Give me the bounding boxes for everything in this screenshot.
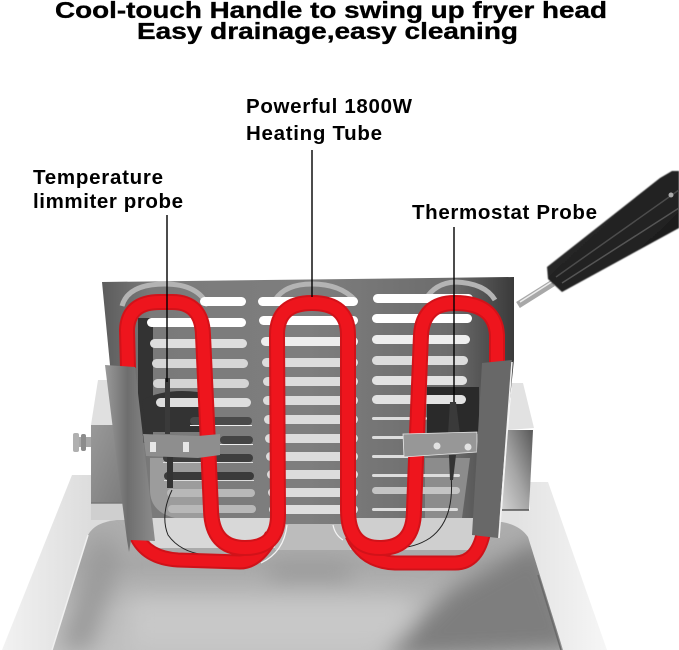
right clamp	[403, 432, 477, 457]
probe wires	[165, 475, 452, 555]
basket plate	[102, 277, 514, 563]
label: temperature limiter probe: limmiter probe	[33, 190, 183, 213]
red heating tube	[127, 302, 497, 563]
thermostat probe	[448, 402, 460, 480]
handle	[518, 171, 679, 305]
temperature limiter probe	[165, 378, 173, 488]
rim	[2, 475, 607, 650]
title	[55, 0, 607, 44]
left head box	[91, 380, 141, 520]
leader lines	[167, 150, 454, 402]
label: heating tube: Heating Tube	[246, 122, 382, 145]
basin	[52, 520, 563, 650]
label: temperature limiter probe: Temperature	[33, 166, 163, 189]
left side bracket	[105, 365, 155, 552]
dark left flange	[138, 318, 153, 443]
lower bowl right	[425, 458, 470, 518]
sensor recess left	[142, 391, 208, 432]
sensor recess right	[427, 387, 479, 434]
label: temperature limiter probe	[33, 166, 183, 213]
white tube reflections	[261, 525, 343, 563]
lower bowl left	[150, 458, 212, 518]
label: heating tube: Powerful 1800W	[246, 95, 413, 118]
fryer body	[2, 380, 607, 650]
right side bracket	[472, 360, 512, 538]
basin light and shadow	[60, 530, 580, 650]
slots column 2	[258, 297, 358, 514]
title: Easy drainage,easy cleaning	[137, 18, 518, 44]
slots column 1	[147, 297, 256, 513]
label: thermostat probe: Thermostat Probe	[412, 201, 597, 224]
left clamp	[143, 434, 220, 458]
label: heating tube	[246, 95, 413, 145]
under-plate bright area	[150, 518, 480, 550]
bowl arcs	[122, 282, 495, 306]
slots column 3	[372, 294, 473, 511]
side knob	[73, 433, 91, 452]
right head box	[502, 383, 534, 510]
